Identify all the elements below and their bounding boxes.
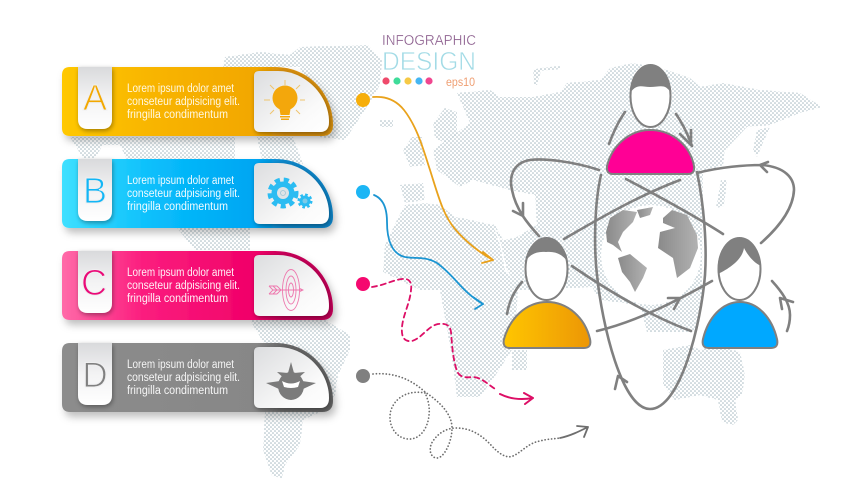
card D: [254, 347, 329, 408]
person: right, blue: [703, 238, 777, 348]
text B: conseteur adpisicing elit.: [127, 188, 240, 200]
text C: fringilla condimentum: [127, 293, 228, 305]
colour dots: [382, 77, 433, 85]
dot: blue: [356, 185, 370, 199]
card A: [254, 71, 329, 132]
tab C: C: [81, 262, 107, 303]
text C: conseteur adpisicing elit.: [127, 280, 240, 292]
arrow: gray dotted connector: [373, 374, 588, 458]
eps10 label: eps10: [446, 75, 475, 89]
tab B: [78, 159, 112, 221]
tab D: D: [82, 356, 108, 395]
card B: [254, 163, 329, 224]
person: left, orange: [504, 238, 590, 348]
banner A: [62, 67, 333, 136]
dotted world map: [70, 45, 822, 478]
network arrows: [507, 112, 794, 409]
text C: [127, 267, 240, 305]
tab A: [78, 67, 112, 129]
text D: conseteur adpisicing elit.: [127, 372, 240, 384]
icon: light bulb: [264, 80, 305, 120]
text A: Lorem ipsum dolor amet: [127, 83, 235, 95]
icon: airplane: [266, 362, 316, 400]
card C: [254, 255, 329, 316]
panel: B: [62, 159, 333, 228]
text B: [127, 175, 240, 213]
icon: gears: [270, 180, 311, 207]
dot: gray: [356, 369, 370, 383]
arrow: orange connector: [373, 97, 493, 263]
arrow: blue connector: [374, 195, 483, 309]
title: design: DESIGN: [382, 46, 476, 76]
tab C: [78, 251, 112, 313]
panel: D: [62, 343, 333, 412]
tab D: [78, 343, 112, 405]
text D: fringilla condimentum: [127, 385, 228, 397]
person: top, pink: [607, 65, 694, 174]
tab A: A: [83, 77, 107, 118]
tab B: B: [83, 170, 107, 211]
text A: [127, 83, 240, 121]
panel: A: [62, 67, 333, 136]
text D: Lorem ipsum dolor amet: [127, 359, 235, 371]
banner C: [62, 251, 333, 320]
dot: orange: [356, 93, 370, 107]
arrow: pink dashed connector: [372, 279, 533, 404]
banner B: [62, 159, 333, 228]
text C: Lorem ipsum dolor amet: [127, 267, 235, 279]
title block: [382, 32, 476, 89]
title: infographic: INFOGRAPHIC: [382, 32, 476, 49]
text A: conseteur adpisicing elit.: [127, 96, 240, 108]
text D: [127, 359, 240, 397]
globe: [606, 207, 698, 292]
text B: fringilla condimentum: [127, 201, 228, 213]
text A: fringilla condimentum: [127, 109, 228, 121]
dot: pink: [356, 277, 370, 291]
banner D: [62, 343, 333, 412]
panel: C: [62, 251, 333, 320]
text B: Lorem ipsum dolor amet: [127, 175, 235, 187]
icon: target and arrow: [269, 270, 303, 310]
